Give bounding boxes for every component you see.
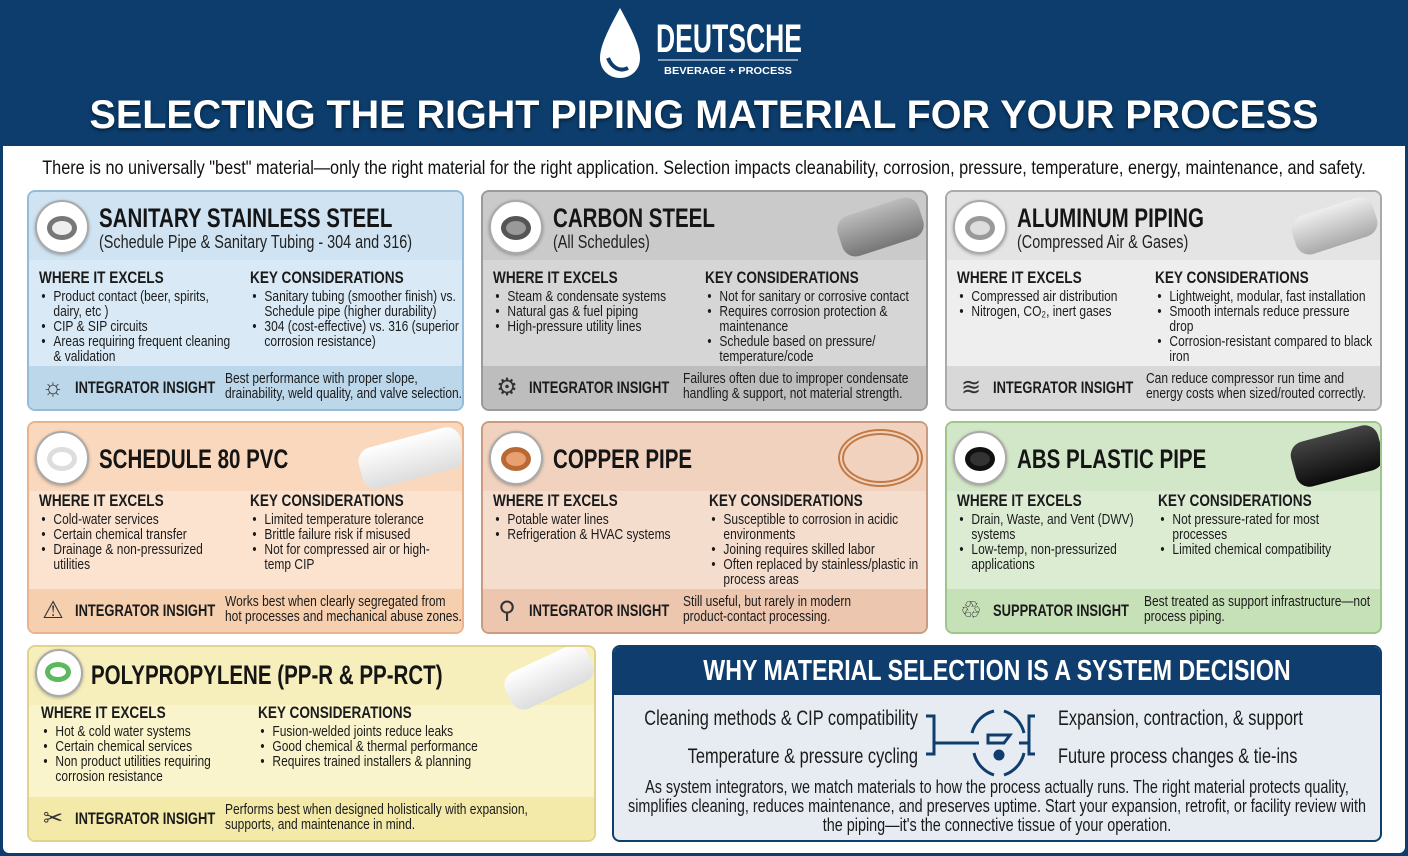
icon: stainless pipe (35, 200, 89, 254)
where it excels (957, 491, 1134, 573)
integrator insight (947, 366, 1380, 409)
panel: carbon steel: (All Schedules) (553, 232, 650, 252)
heading: POLYPROPYLENE (PP-R & PP-RCT) (91, 660, 443, 690)
integrator insight: INTEGRATOR INSIGHT (993, 378, 1133, 397)
key considerations (258, 703, 478, 770)
panel: aluminum piping (945, 190, 1382, 411)
factors left (644, 707, 918, 768)
where it excels: Drain, Waste, and Vent (DWV) systems (971, 511, 1134, 543)
key considerations: Corrosion-resistant compared to black iron (1169, 333, 1372, 365)
integrator insight: SUPPRATOR INSIGHT (993, 601, 1129, 620)
heading: WHY MATERIAL SELECTION IS A SYSTEM DECISION (703, 655, 1291, 687)
key considerations: Not pressure-rated for most processes (1172, 511, 1319, 543)
key considerations: Requires trained installers & planning (272, 753, 471, 770)
factors left: Cleaning methods & CIP compatibility (644, 707, 918, 730)
integrator insight: Works best when clearly segregated from (225, 593, 446, 610)
key considerations: Lightweight, modular, fast installation (1169, 288, 1366, 305)
where it excels: WHERE IT EXCELS (957, 268, 1082, 287)
factors right: Expansion, contraction, & support (1058, 707, 1303, 730)
heading: ALUMINUM PIPING (1017, 203, 1204, 233)
integrator insight: ⚠ (42, 597, 64, 624)
key considerations: KEY CONSIDERATIONS (705, 268, 859, 287)
where it excels (41, 703, 211, 785)
key considerations: Requires corrosion protection & maintenance (719, 303, 887, 335)
pipe image (834, 194, 927, 260)
key considerations: Sanitary tubing (smoother finish) vs. Schedule pipe (higher durability) (264, 288, 456, 320)
where it excels (493, 491, 671, 543)
where it excels: Non product utilities requiring corrosion resistance (55, 753, 211, 785)
key considerations: KEY CONSIDERATIONS (1155, 268, 1309, 287)
where it excels: Refrigeration & HVAC systems (507, 526, 671, 543)
logo (600, 8, 802, 78)
pipe image (500, 640, 598, 714)
integrator insight: Can reduce compressor run time and (1146, 370, 1344, 387)
key considerations (250, 268, 459, 350)
where it excels: Areas requiring frequent cleaning & validation (53, 333, 230, 365)
key considerations: Fusion-welded joints reduce leaks (272, 723, 453, 740)
coil image (838, 429, 923, 487)
key considerations: Limited temperature tolerance (264, 511, 424, 528)
conclusion text: As system integrators, we match materials to how the process actually runs. The right material protects quality, simplifies cleaning, reduces maintenance, and preserves uptime. Start your expansion, retrofit, or facility review with the piping—it's the connective tissue of your operation. (628, 777, 1366, 835)
integrator insight: Performs best when designed holistically with expansion, (225, 801, 528, 818)
panel: schedule 80 pvc (27, 421, 464, 634)
integrator insight: INTEGRATOR INSIGHT (529, 378, 669, 397)
panel: sanitary stainless steel (27, 190, 464, 411)
icon: copper fitting (489, 431, 543, 485)
integrator insight: ≋ (961, 374, 981, 401)
where it excels: Cold-water services (53, 511, 159, 528)
key considerations: Joining requires skilled labor (723, 541, 875, 558)
integrator insight: energy costs when sized/routed correctly. (1146, 385, 1366, 402)
integrator insight (483, 589, 926, 632)
key considerations: KEY CONSIDERATIONS (250, 491, 404, 510)
icon: abs pipe (953, 431, 1007, 485)
where it excels: High-pressure utility lines (507, 318, 641, 335)
icon: aluminum pipe (953, 200, 1007, 254)
where it excels: Certain chemical transfer (53, 526, 187, 543)
key considerations: KEY CONSIDERATIONS (709, 491, 863, 510)
key considerations: KEY CONSIDERATIONS (1158, 491, 1312, 510)
integrator insight: handling & support, not material strength. (683, 385, 902, 402)
integrator insight: drainability, weld quality, and valve selection. (225, 385, 462, 402)
heading: COPPER PIPE (553, 444, 692, 474)
integrator insight: supports, and maintenance in mind. (225, 816, 415, 833)
key considerations: Often replaced by stainless/plastic in process areas (723, 556, 918, 588)
pipe image (1288, 422, 1386, 490)
key considerations: Not for sanitary or corrosive contact (719, 288, 909, 305)
title: SELECTING THE RIGHT PIPING MATERIAL FOR YOUR PROCESS (90, 93, 1318, 137)
key considerations: Good chemical & thermal performance (272, 738, 478, 755)
key considerations (709, 491, 918, 588)
where it excels: WHERE IT EXCELS (493, 491, 618, 510)
where it excels: Nitrogen, CO₂, inert gases (971, 303, 1111, 320)
icon: pp pipe (35, 649, 83, 697)
integrator insight: INTEGRATOR INSIGHT (75, 378, 215, 397)
integrator insight: ⚙ (496, 374, 518, 401)
heading: ABS PLASTIC PIPE (1017, 444, 1206, 474)
where it excels (957, 268, 1117, 320)
panel: copper pipe (481, 421, 928, 634)
key considerations: 304 (cost-effective) vs. 316 (superior corrosion resistance) (264, 318, 459, 350)
key considerations (250, 491, 430, 573)
key considerations (1158, 491, 1332, 558)
where it excels: Certain chemical services (55, 738, 192, 755)
where it excels: Steam & condensate systems (507, 288, 666, 305)
integrator insight: ☼ (42, 374, 64, 401)
key considerations: KEY CONSIDERATIONS (250, 268, 404, 287)
heading: SANITARY STAINLESS STEEL (99, 203, 392, 233)
integrator insight: ✂ (43, 805, 63, 832)
factors right: Future process changes & tie-ins (1058, 745, 1297, 768)
integrator insight: INTEGRATOR INSIGHT (529, 601, 669, 620)
pipe image (355, 424, 468, 492)
where it excels: Natural gas & fuel piping (507, 303, 638, 320)
integrator insight (947, 589, 1380, 632)
icon: cycle diagram (926, 710, 1035, 776)
where it excels: Product contact (beer, spirits, dairy, etc ) (53, 288, 209, 320)
integrator insight: INTEGRATOR INSIGHT (75, 809, 215, 828)
key considerations: Limited chemical compatibility (1172, 541, 1331, 558)
where it excels: WHERE IT EXCELS (39, 268, 164, 287)
logo: BEVERAGE + PROCESS (664, 66, 792, 77)
where it excels: Drainage & non-pressurized utilities (53, 541, 203, 573)
key considerations (1155, 268, 1372, 365)
key considerations (705, 268, 909, 365)
icon: carbon pipe (489, 200, 543, 254)
integrator insight: Best performance with proper slope, (225, 370, 418, 387)
integrator insight: Best treated as support infrastructure—not (1144, 593, 1370, 610)
where it excels (39, 268, 230, 365)
pipe image (1288, 194, 1381, 258)
where it excels: WHERE IT EXCELS (957, 491, 1082, 510)
panel: polypropylene (27, 645, 596, 842)
where it excels: Potable water lines (507, 511, 609, 528)
where it excels: WHERE IT EXCELS (39, 491, 164, 510)
panel: aluminum piping: (Compressed Air & Gases) (1017, 232, 1188, 252)
panel: why material selection (612, 645, 1382, 842)
where it excels: Low-temp, non-pressurized applications (971, 541, 1117, 573)
where it excels: CIP & SIP circuits (53, 318, 148, 335)
integrator insight: process piping. (1144, 608, 1225, 625)
intro text: There is no universally "best" material—only the right material for the right application. Selection impacts cleanability, corrosion, pressure, temperature, energy, maintenance, and safety. (42, 158, 1366, 179)
heading: SCHEDULE 80 PVC (99, 444, 288, 474)
where it excels (493, 268, 666, 335)
key considerations: KEY CONSIDERATIONS (258, 703, 412, 722)
where it excels: Compressed air distribution (971, 288, 1117, 305)
where it excels: Hot & cold water systems (55, 723, 191, 740)
where it excels: WHERE IT EXCELS (41, 703, 166, 722)
integrator insight: ⚲ (498, 597, 516, 624)
integrator insight: Still useful, but rarely in modern (683, 593, 851, 610)
integrator insight (29, 589, 462, 632)
key considerations: Susceptible to corrosion in acidic environments (723, 511, 898, 543)
integrator insight: INTEGRATOR INSIGHT (75, 601, 215, 620)
panel: carbon steel (481, 190, 928, 411)
integrator insight (29, 797, 594, 840)
integrator insight: Failures often due to improper condensate (683, 370, 908, 387)
panel: sanitary stainless steel: (Schedule Pipe & Sanitary Tubing - 304 and 316) (99, 232, 412, 252)
integrator insight: ♲ (960, 597, 982, 624)
integrator insight (29, 366, 462, 409)
factors left: Temperature & pressure cycling (688, 745, 918, 768)
key considerations: Smooth internals reduce pressure drop (1169, 303, 1350, 335)
key considerations: Brittle failure risk if misused (264, 526, 410, 543)
integrator insight: product-contact processing. (683, 608, 830, 625)
factors right (1058, 707, 1303, 768)
where it excels (39, 491, 203, 573)
integrator insight: hot processes and mechanical abuse zones. (225, 608, 462, 625)
heading (611, 647, 1383, 695)
panel: abs plastic pipe (945, 421, 1382, 634)
heading: CARBON STEEL (553, 203, 715, 233)
integrator insight (483, 366, 926, 409)
key considerations: Not for compressed air or high-temp CIP (264, 541, 430, 573)
icon: pvc pipe (35, 431, 89, 485)
where it excels: WHERE IT EXCELS (493, 268, 618, 287)
key considerations: Schedule based on pressure/ temperature/code (719, 333, 876, 365)
